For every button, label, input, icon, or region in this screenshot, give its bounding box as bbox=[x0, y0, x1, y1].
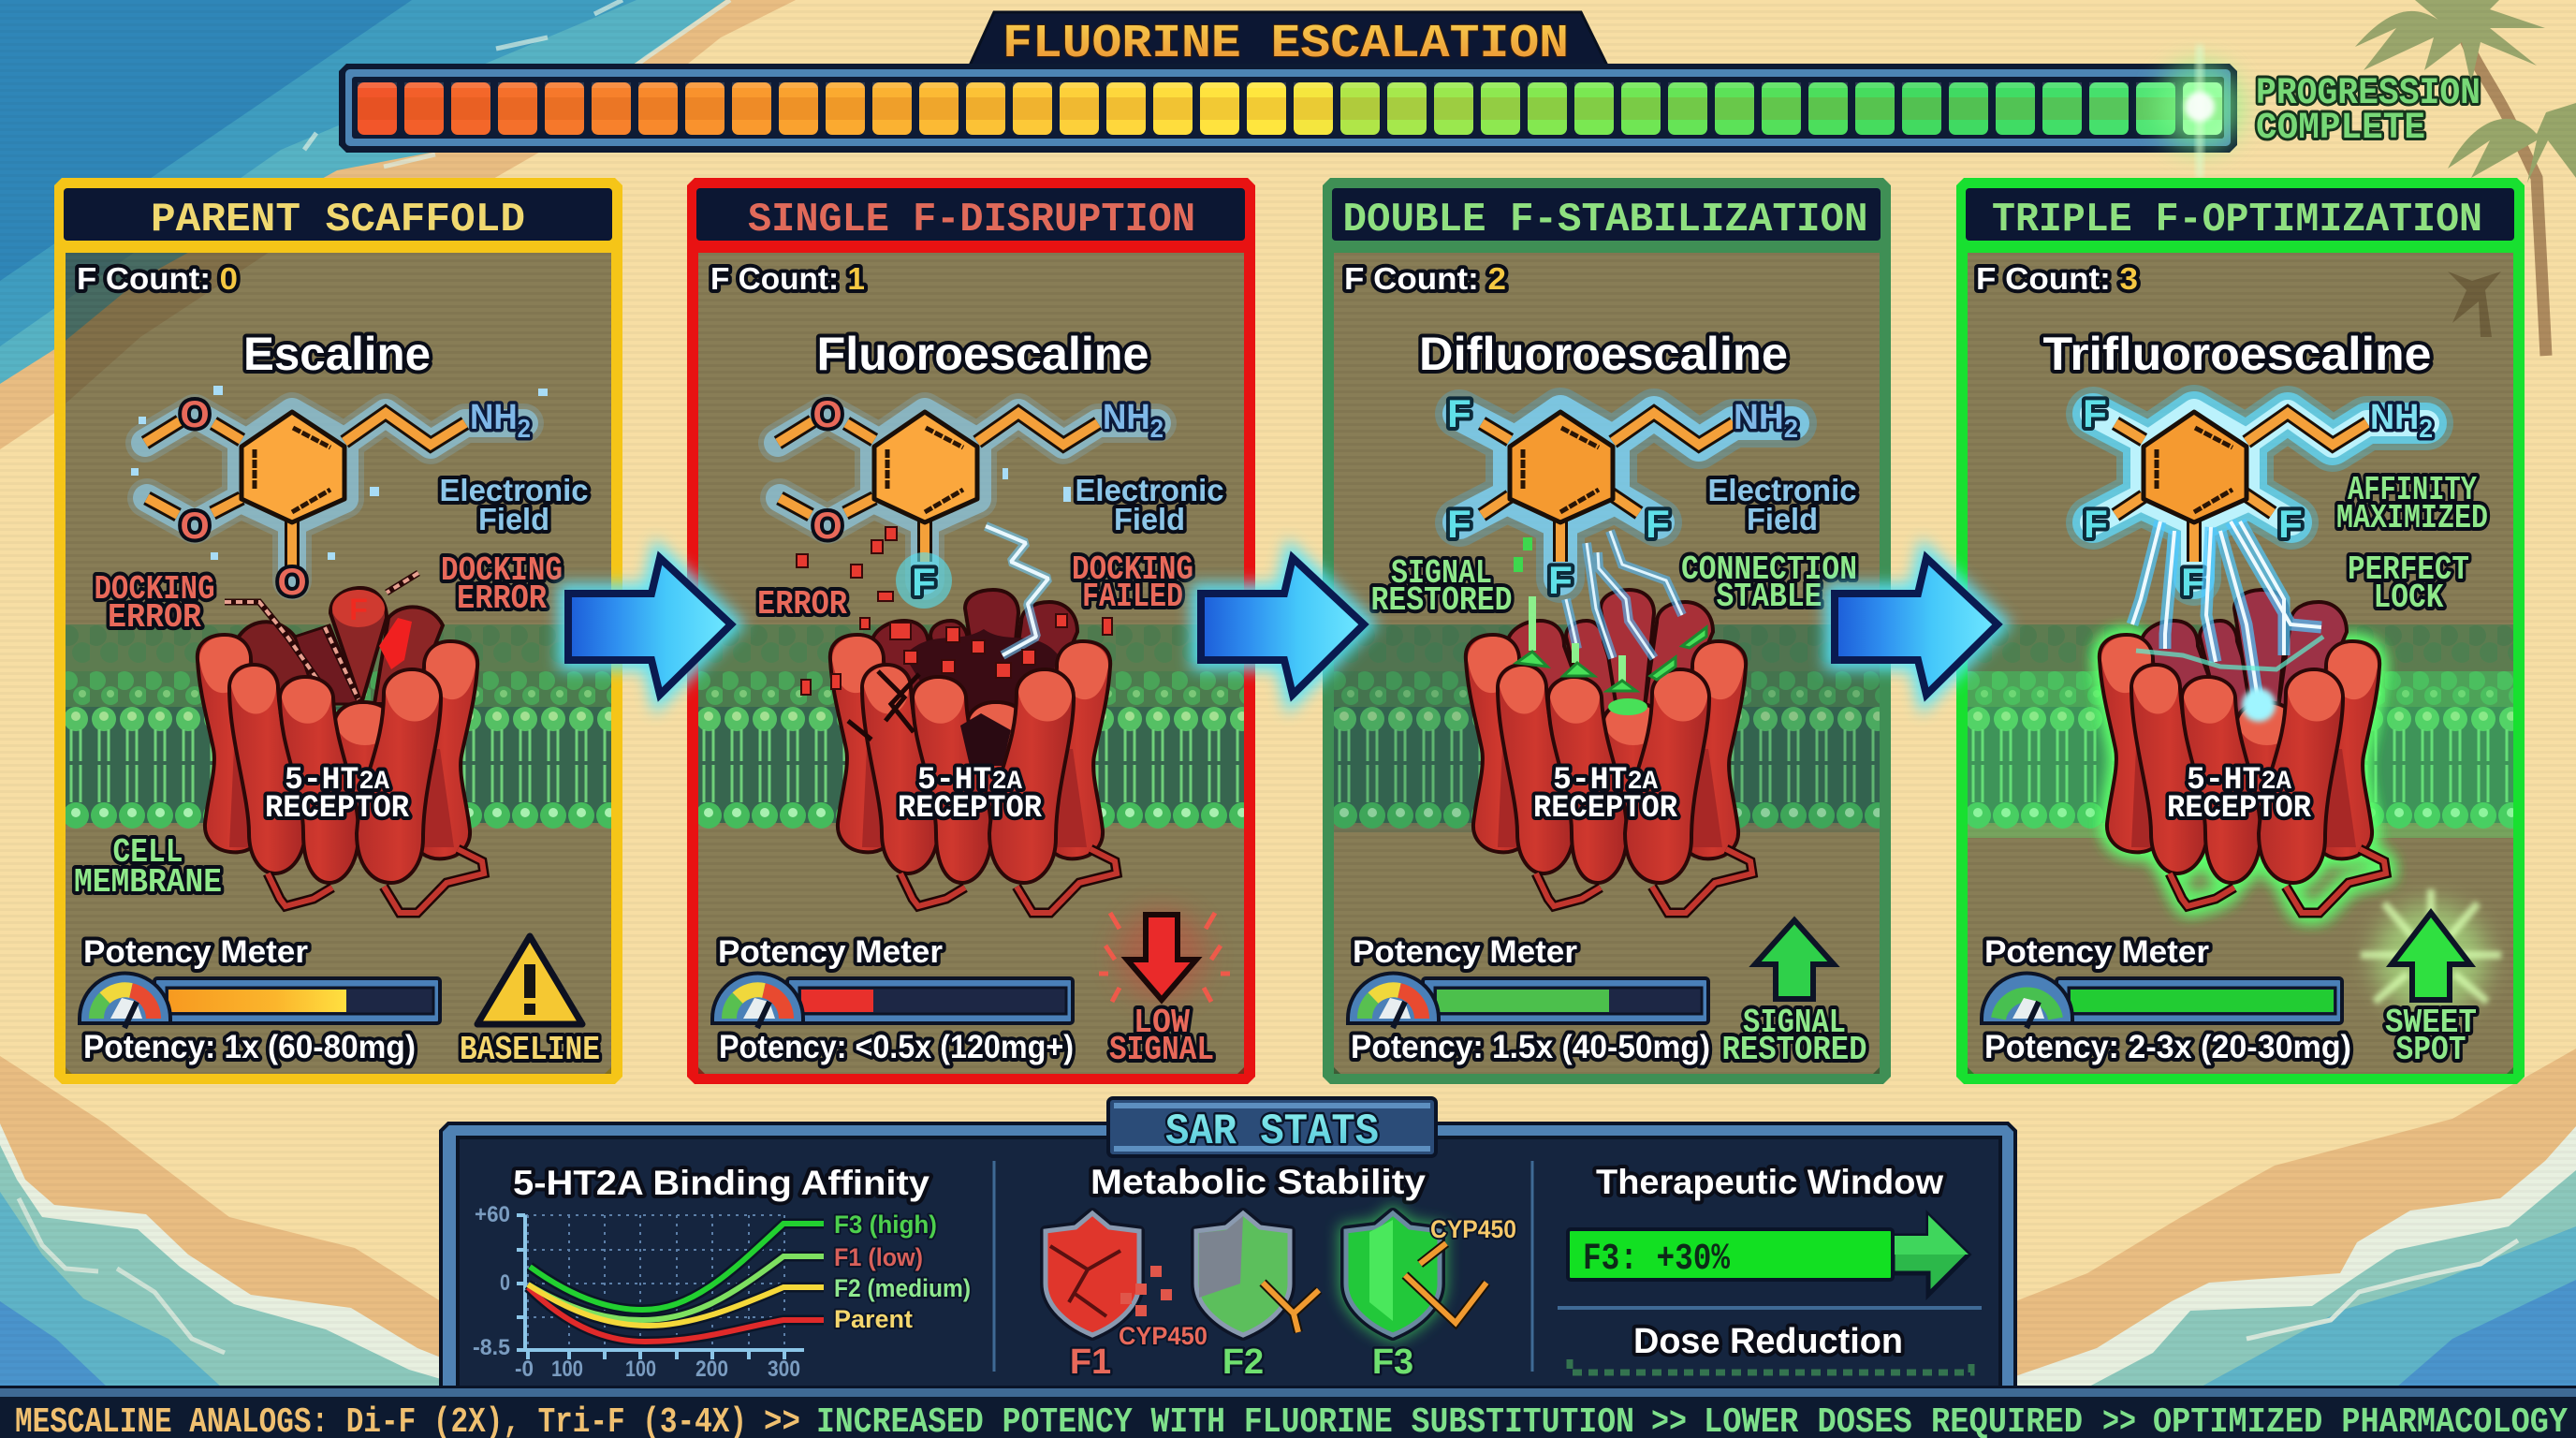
potency meter: Potency Meter bbox=[83, 934, 308, 970]
chart: binding affinity: +60 bbox=[475, 1202, 510, 1227]
progression complete label bbox=[2256, 73, 2481, 150]
labels: affinity and lock: LOCK bbox=[2374, 579, 2444, 617]
compound name: Trifluoroescaline bbox=[2042, 328, 2432, 380]
potency meter: Potency: 2-3x (20-30mg) bbox=[1984, 1029, 2351, 1065]
heading: binding affinity: 5-HT2A Binding Affinity bbox=[513, 1164, 929, 1202]
receptor bbox=[1466, 635, 1752, 913]
chart: binding affinity: 200 bbox=[695, 1357, 728, 1382]
therapeutic window bar: F3: +30% bbox=[1583, 1239, 1731, 1281]
heading: SAR stats: SAR STATS bbox=[1165, 1108, 1379, 1156]
potency meter: Potency Meter bbox=[1353, 934, 1577, 970]
potency meter: Potency: 1x (60-80mg) bbox=[83, 1029, 416, 1065]
label: receptor: 5-HT2A bbox=[2187, 763, 2291, 799]
receptor bbox=[830, 635, 1117, 913]
electronic field glow bbox=[131, 386, 548, 580]
electronic field glow bbox=[2093, 412, 2426, 579]
labels: docking errors: DOCKING bbox=[441, 551, 563, 590]
progress end flare bbox=[2157, 45, 2243, 178]
molecule: difluoroescaline: 2 bbox=[1784, 414, 1798, 443]
chart: binding affinity bbox=[473, 1202, 824, 1382]
label: electronic field bbox=[440, 473, 588, 536]
labels: affinity and lock: PERFECT bbox=[2348, 550, 2469, 589]
icon: signal restored arrow: SIGNAL bbox=[1743, 1004, 1846, 1042]
electronic field glow bbox=[1459, 412, 1793, 579]
F count: F Count: 1 bbox=[710, 261, 865, 296]
progression complete label: PROGRESSION bbox=[2256, 73, 2481, 115]
crater in receptor bbox=[871, 590, 1077, 740]
receptor binding pocket bbox=[2141, 590, 2347, 740]
label: receptor: 5-HT2A bbox=[1553, 763, 1658, 799]
misplaced fluorine mark: F bbox=[349, 593, 368, 626]
labels: signal and connection: STABLE bbox=[1717, 578, 1822, 616]
molecule: trifluoroescaline: F bbox=[2278, 502, 2303, 546]
header: SINGLE F-DISRUPTION bbox=[748, 197, 1195, 243]
panel: single F disruption bbox=[687, 178, 1255, 1084]
membrane, glowing bbox=[1968, 624, 2513, 838]
label: electronic field bbox=[1075, 473, 1224, 536]
icon: signal restored arrow bbox=[1722, 920, 1866, 1069]
label: electronic field: Field bbox=[478, 502, 549, 536]
chart: binding affinity: 0 bbox=[500, 1270, 510, 1296]
compound name: Fluoroescaline bbox=[816, 328, 1149, 380]
icon: F1 shield broken: CYP450 bbox=[1119, 1322, 1208, 1350]
potency meter: Potency Meter bbox=[718, 934, 943, 970]
icon: warning baseline bbox=[460, 936, 600, 1069]
potency meter: Potency: 1.5x (40-50mg) bbox=[1351, 1029, 1710, 1065]
label: electronic field bbox=[1707, 473, 1857, 536]
molecule: difluoroescaline: F bbox=[1548, 558, 1573, 602]
icon: low signal arrow bbox=[1099, 908, 1230, 1069]
icon: sweet spot burst arrow: SWEET bbox=[2385, 1004, 2477, 1042]
label: error: ERROR bbox=[757, 585, 847, 624]
panel: SAR stats bbox=[441, 1098, 2015, 1395]
molecule: fluoroescaline: O bbox=[812, 506, 842, 547]
labels: signal and connection bbox=[1370, 550, 1857, 620]
molecule: fluoroescaline: 2 bbox=[1150, 414, 1164, 443]
chart: binding affinity: -0 bbox=[515, 1357, 534, 1382]
molecule: trifluoroescaline: F bbox=[2084, 502, 2108, 546]
potency meter: Potency: <0.5x (120mg+) bbox=[719, 1029, 1074, 1065]
label: electronic field: Electronic bbox=[1707, 473, 1857, 507]
molecule: escaline: NH bbox=[470, 398, 521, 437]
icon: F2 shield partial bbox=[1196, 1213, 1319, 1382]
icon: F1 shield broken: F1 bbox=[1070, 1343, 1111, 1382]
icon: F3 shield strong bbox=[1346, 1213, 1516, 1382]
labels: affinity and lock bbox=[2336, 471, 2488, 617]
compound name: Escaline bbox=[243, 328, 431, 380]
panel: double F stabilization bbox=[1323, 178, 1891, 1084]
heading: dose reduction: Dose Reduction bbox=[1633, 1322, 1903, 1361]
header: PARENT SCAFFOLD bbox=[151, 197, 525, 243]
labels: affinity and lock: AFFINITY bbox=[2348, 471, 2477, 509]
labels: docking errors: ERROR bbox=[457, 580, 547, 618]
molecule: fluoroescaline: NH bbox=[1103, 398, 1154, 437]
chart: binding affinity: 100 bbox=[551, 1357, 583, 1382]
membrane bbox=[66, 624, 611, 832]
icon: F3 shield strong: CYP450 bbox=[1430, 1215, 1516, 1243]
arrow: panel 2 to 3 bbox=[1201, 558, 1364, 695]
dock error lines bbox=[225, 573, 418, 699]
icon: warning baseline: BASELINE bbox=[460, 1031, 600, 1069]
label: receptor: 5-HT2A bbox=[917, 763, 1022, 799]
labels: docking errors bbox=[94, 551, 563, 637]
receptor glow bbox=[2100, 635, 2386, 913]
panel: triple F optimization bbox=[1956, 178, 2525, 1084]
label: receptor bbox=[898, 763, 1043, 827]
label: docking failed: FAILED bbox=[1082, 578, 1183, 616]
lightning fan bbox=[2132, 521, 2323, 722]
panel: parent scaffold bbox=[54, 178, 622, 1084]
labels: docking errors: ERROR bbox=[108, 598, 201, 637]
icon: signal restored arrow: RESTORED bbox=[1722, 1031, 1866, 1069]
label: receptor bbox=[1533, 763, 1678, 827]
F count: F Count: 2 bbox=[1344, 261, 1506, 296]
labels: affinity and lock: MAXIMIZED bbox=[2336, 499, 2488, 537]
icon: sweet spot burst arrow: SPOT bbox=[2396, 1031, 2466, 1069]
molecule: trifluoroescaline: F bbox=[2083, 391, 2107, 435]
label: electronic field: Field bbox=[1114, 502, 1185, 536]
icon: F2 shield partial: F2 bbox=[1222, 1343, 1264, 1382]
molecule: difluoroescaline: F bbox=[1646, 502, 1670, 546]
cracks and crater overlay bbox=[848, 671, 1011, 766]
chart legend: F1 (low) bbox=[834, 1243, 923, 1271]
chart legend: F2 (medium) bbox=[834, 1274, 971, 1302]
icon: F3 shield strong: F3 bbox=[1372, 1343, 1413, 1382]
title banner: Fluorine Escalation: FLUORINE ESCALATION bbox=[1003, 18, 1569, 71]
therapeutic window bar bbox=[1568, 1215, 1969, 1295]
heading: metabolic stability: Metabolic Stability bbox=[1090, 1163, 1426, 1201]
potency meter: Potency Meter bbox=[1984, 934, 2209, 970]
molecule: difluoroescaline: F bbox=[1447, 502, 1471, 546]
chart: binding affinity: -8.5 bbox=[473, 1335, 510, 1360]
label: receptor: RECEPTOR bbox=[1533, 791, 1678, 827]
labels: signal and connection: CONNECTION bbox=[1681, 550, 1857, 589]
receptor binding pocket bbox=[1507, 590, 1713, 740]
chart: binding affinity: 300 bbox=[768, 1357, 800, 1382]
molecule: escaline: 2 bbox=[518, 414, 531, 443]
potency meter bbox=[1348, 934, 1710, 1065]
molecule: trifluoroescaline bbox=[2083, 391, 2433, 604]
header bbox=[64, 188, 612, 243]
header: TRIPLE F-OPTIMIZATION bbox=[1992, 197, 2482, 243]
electronic field glow bbox=[778, 412, 1157, 580]
membrane bbox=[1334, 624, 1880, 832]
icon: sweet spot burst arrow bbox=[2361, 889, 2501, 1069]
membrane bbox=[698, 624, 1244, 832]
molecule: difluoroescaline: F bbox=[1447, 391, 1471, 435]
chart legend: Parent bbox=[834, 1305, 913, 1333]
icon: F1 shield broken bbox=[1046, 1213, 1208, 1382]
molecule: difluoroescaline bbox=[1447, 391, 1798, 602]
label: cell membrane: CELL bbox=[112, 833, 183, 872]
potency meter bbox=[80, 934, 440, 1065]
label: electronic field: Field bbox=[1747, 502, 1818, 536]
chart legend: F3 (high) bbox=[834, 1211, 937, 1239]
label: receptor bbox=[265, 763, 410, 827]
label: receptor: RECEPTOR bbox=[898, 791, 1043, 827]
receptor bbox=[2100, 635, 2386, 913]
signal lines and green docking bbox=[1514, 531, 1706, 715]
header: DOUBLE F-STABILIZATION bbox=[1342, 197, 1868, 243]
molecule: escaline bbox=[145, 394, 531, 603]
progression complete label: COMPLETE bbox=[2256, 108, 2425, 150]
dose reduction dashes bbox=[1570, 1359, 1971, 1372]
heading: therapeutic window: Therapeutic Window bbox=[1596, 1163, 1943, 1201]
molecule: escaline: O bbox=[277, 562, 307, 603]
lightning bbox=[986, 526, 1048, 655]
label: docking failed bbox=[1072, 550, 1193, 616]
label: receptor: 5-HT2A bbox=[285, 763, 389, 799]
labels: signal and connection: SIGNAL bbox=[1391, 554, 1492, 593]
receptor bbox=[198, 635, 484, 913]
progress cells bbox=[358, 82, 2230, 135]
label: receptor: RECEPTOR bbox=[2167, 791, 2312, 827]
icon: low signal arrow: LOW bbox=[1134, 1004, 1190, 1042]
news ticker bbox=[0, 1386, 2576, 1438]
F count: F Count: 3 bbox=[1976, 261, 2138, 296]
molecule: fluoroescaline: O bbox=[812, 394, 842, 435]
label: electronic field: Electronic bbox=[1075, 473, 1224, 507]
molecule: trifluoroescaline: NH bbox=[2370, 398, 2422, 437]
label: receptor bbox=[2167, 763, 2312, 827]
F count: F Count: 0 bbox=[77, 261, 238, 296]
molecule: difluoroescaline: NH bbox=[1734, 398, 1785, 437]
labels: signal and connection: RESTORED bbox=[1370, 581, 1513, 620]
molecule: fluoroescaline: F bbox=[912, 560, 936, 604]
label: cell membrane: MEMBRANE bbox=[74, 863, 222, 902]
labels: docking errors: DOCKING bbox=[94, 570, 215, 609]
molecule: trifluoroescaline: 2 bbox=[2419, 414, 2433, 443]
icon: low signal arrow: SIGNAL bbox=[1109, 1031, 1214, 1069]
chart legend bbox=[834, 1211, 971, 1333]
molecule: escaline: O bbox=[180, 506, 210, 547]
label: receptor: RECEPTOR bbox=[265, 791, 410, 827]
compound name: Difluoroescaline bbox=[1419, 328, 1788, 380]
arrow: panel 3 to 4 bbox=[1835, 558, 1998, 695]
molecule: escaline: O bbox=[180, 394, 210, 435]
potency meter bbox=[712, 934, 1074, 1065]
debris squares bbox=[797, 527, 1112, 695]
potency meter bbox=[1982, 934, 2351, 1065]
molecule: fluoroescaline bbox=[778, 394, 1164, 609]
receptor binding pocket bbox=[239, 588, 443, 712]
label: cell membrane bbox=[74, 833, 222, 902]
progress bar bbox=[339, 45, 2243, 178]
chart: binding affinity: 100 bbox=[625, 1357, 656, 1382]
label: docking failed: DOCKING bbox=[1072, 550, 1193, 589]
molecule: trifluoroescaline: F bbox=[2181, 560, 2205, 604]
label: electronic field: Electronic bbox=[440, 473, 588, 507]
arrow: panel 1 to 2 bbox=[568, 558, 731, 695]
